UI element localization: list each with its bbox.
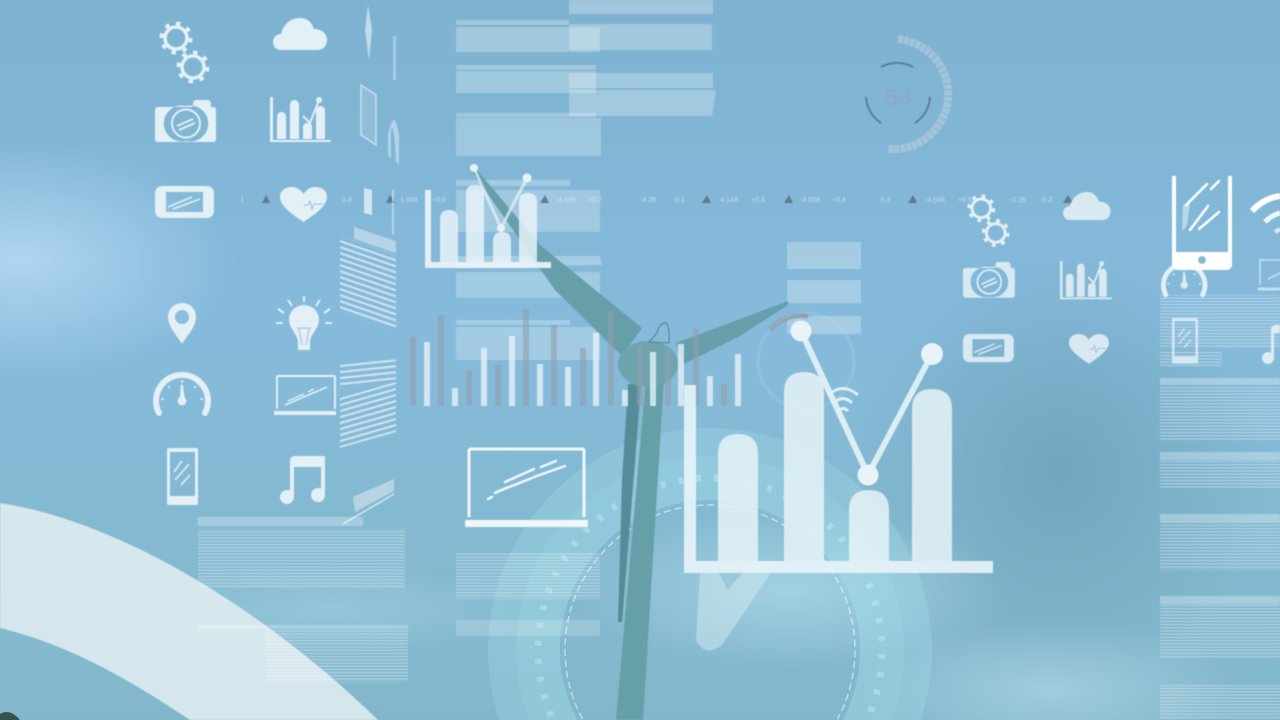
icon: camera (155, 100, 216, 142)
icon: wifi (1252, 196, 1280, 232)
ticker row of market values: +0.7 (588, 197, 602, 204)
icon: bar chart (1060, 261, 1112, 299)
ticker row of market values: -4.148 (718, 197, 738, 204)
icon: music note faded (1262, 325, 1280, 364)
translucent text bars top centre (456, 0, 861, 360)
big chart bars (718, 372, 952, 561)
icon: cloud (273, 18, 327, 50)
ticker row of market values: -0.1 (673, 197, 685, 204)
gauge value: 53 (885, 84, 911, 110)
ticker row of market values: +0.6 (432, 197, 446, 204)
skewed text block one (340, 222, 396, 331)
icon: music note (280, 456, 325, 504)
ticker row of market values (240, 195, 1073, 204)
chart axes (425, 190, 551, 268)
ticker row of market values: 1 (240, 197, 244, 204)
text blocks lower centre (456, 553, 600, 636)
mid bar chart (410, 309, 741, 406)
large laptop icon (465, 449, 588, 527)
circular gauge 53 (866, 39, 948, 149)
ticker row of market values: -0.2 (1040, 197, 1052, 204)
large white arc lower left (0, 503, 378, 720)
icon: map pin (168, 303, 196, 344)
ticker row of market values: -4.26 (640, 197, 656, 204)
skewed text panels left (340, 5, 399, 524)
turbine upper-left blade (471, 170, 642, 356)
bar group right column (569, 0, 716, 116)
gauge inner dark arcs (866, 63, 930, 123)
icon: gears (969, 196, 1008, 245)
big chart axes (684, 385, 993, 573)
icon: laptop (274, 376, 336, 415)
icon: phone (167, 448, 198, 505)
wind turbine (471, 170, 788, 720)
grey bars (410, 309, 727, 406)
turbine lower blade (618, 384, 641, 622)
ticker row of market values: -0.3 (878, 197, 890, 204)
icon grid left (155, 18, 336, 505)
icon: phone faded (1172, 318, 1198, 364)
ticker row of market values: -2.26 (1010, 197, 1026, 204)
bar group centre right (787, 242, 861, 334)
icon: wifi faded (828, 388, 858, 411)
dark treetop corner (0, 712, 20, 720)
icon: gauge (156, 375, 208, 413)
ticker row of market values: +0.5 (958, 197, 972, 204)
ticker row of market values: +0.3 (751, 197, 765, 204)
turbine tower (616, 378, 664, 720)
icon: heart (1069, 334, 1109, 364)
icon: heart (280, 187, 327, 222)
big chart trend line (790, 320, 943, 486)
skewed ribbon (343, 479, 394, 524)
dial grey arc (770, 315, 808, 330)
HUD concentric rings (488, 428, 932, 720)
chart bars (440, 185, 537, 262)
ticker row of market values: -4.508 (800, 197, 820, 204)
skewed top fragments (361, 5, 399, 235)
icon: gauge faded (1163, 264, 1205, 295)
faded HUD dial behind big chart (758, 313, 858, 411)
bar group left column (456, 20, 602, 360)
text block stack (1160, 295, 1280, 720)
icon: light bulb (276, 296, 332, 350)
ticker row of market values: 1.508 (400, 197, 418, 204)
icon: cloud (1063, 192, 1111, 220)
turbine hub (618, 341, 678, 387)
icon: tablet (963, 334, 1014, 362)
ticker row of market values: 0.8 (342, 197, 352, 204)
turbine nacelle detail (649, 323, 669, 343)
ticker row of market values: +0.4 (832, 197, 846, 204)
icon: gears (162, 24, 208, 82)
ticker row of market values: -4.146 (556, 197, 576, 204)
icon: tablet (155, 186, 214, 218)
far right panel (1160, 176, 1280, 720)
big bar chart (684, 320, 993, 650)
icon: camera (963, 262, 1015, 298)
icon: large phone (1172, 176, 1232, 270)
skewed text block two (340, 359, 396, 389)
ticker row of market values: -4.506 (925, 197, 945, 204)
text blocks lower left (198, 517, 408, 682)
skewed text block three (340, 382, 396, 448)
icon: laptop faded (1258, 260, 1280, 289)
small bar chart centre (425, 164, 551, 268)
white bars (424, 333, 741, 406)
icon: bar chart (270, 97, 331, 142)
turbine right blade (676, 301, 788, 364)
gauge outer progress arc (888, 39, 948, 149)
icon grid right (963, 192, 1112, 364)
translucent V marker (696, 561, 776, 650)
chart trend line (470, 164, 532, 232)
